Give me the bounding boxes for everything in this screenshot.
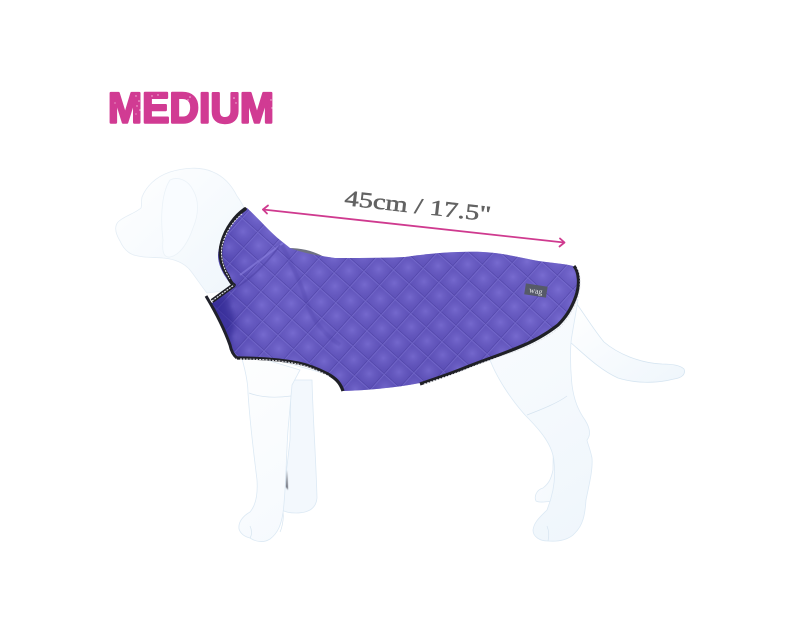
- reflective piping: collar strap: [212, 285, 234, 301]
- measurement label: 45cm / 17.5": [343, 185, 492, 226]
- neck and head: [116, 168, 246, 293]
- fold shadows: [282, 245, 340, 345]
- ear: [162, 178, 198, 257]
- reflective piping: hem: [237, 358, 343, 391]
- brand label: [524, 283, 548, 298]
- reflective piping: collar: [220, 209, 245, 285]
- far hind leg and paw: [535, 395, 585, 502]
- measurement arrow: [263, 206, 564, 246]
- leg seams: [249, 393, 567, 541]
- brand label: wag: [529, 286, 543, 296]
- front-leg gap shadow: [286, 470, 288, 490]
- purple quilted coat: [204, 207, 580, 392]
- coat body: [206, 208, 579, 391]
- far front leg: [282, 380, 317, 513]
- grey under-collar: [288, 248, 326, 260]
- title: MEDIUM: MEDIUM: [108, 84, 274, 132]
- reflective piping: rear edge: [420, 266, 578, 384]
- tail: [570, 300, 685, 382]
- dog mannequin: [116, 168, 685, 542]
- shading: [211, 208, 577, 391]
- quilting: [212, 208, 577, 391]
- reflective piping: chest: [206, 296, 237, 358]
- infographic canvas: [110, 92, 685, 542]
- body, hind leg and front leg: [239, 300, 592, 542]
